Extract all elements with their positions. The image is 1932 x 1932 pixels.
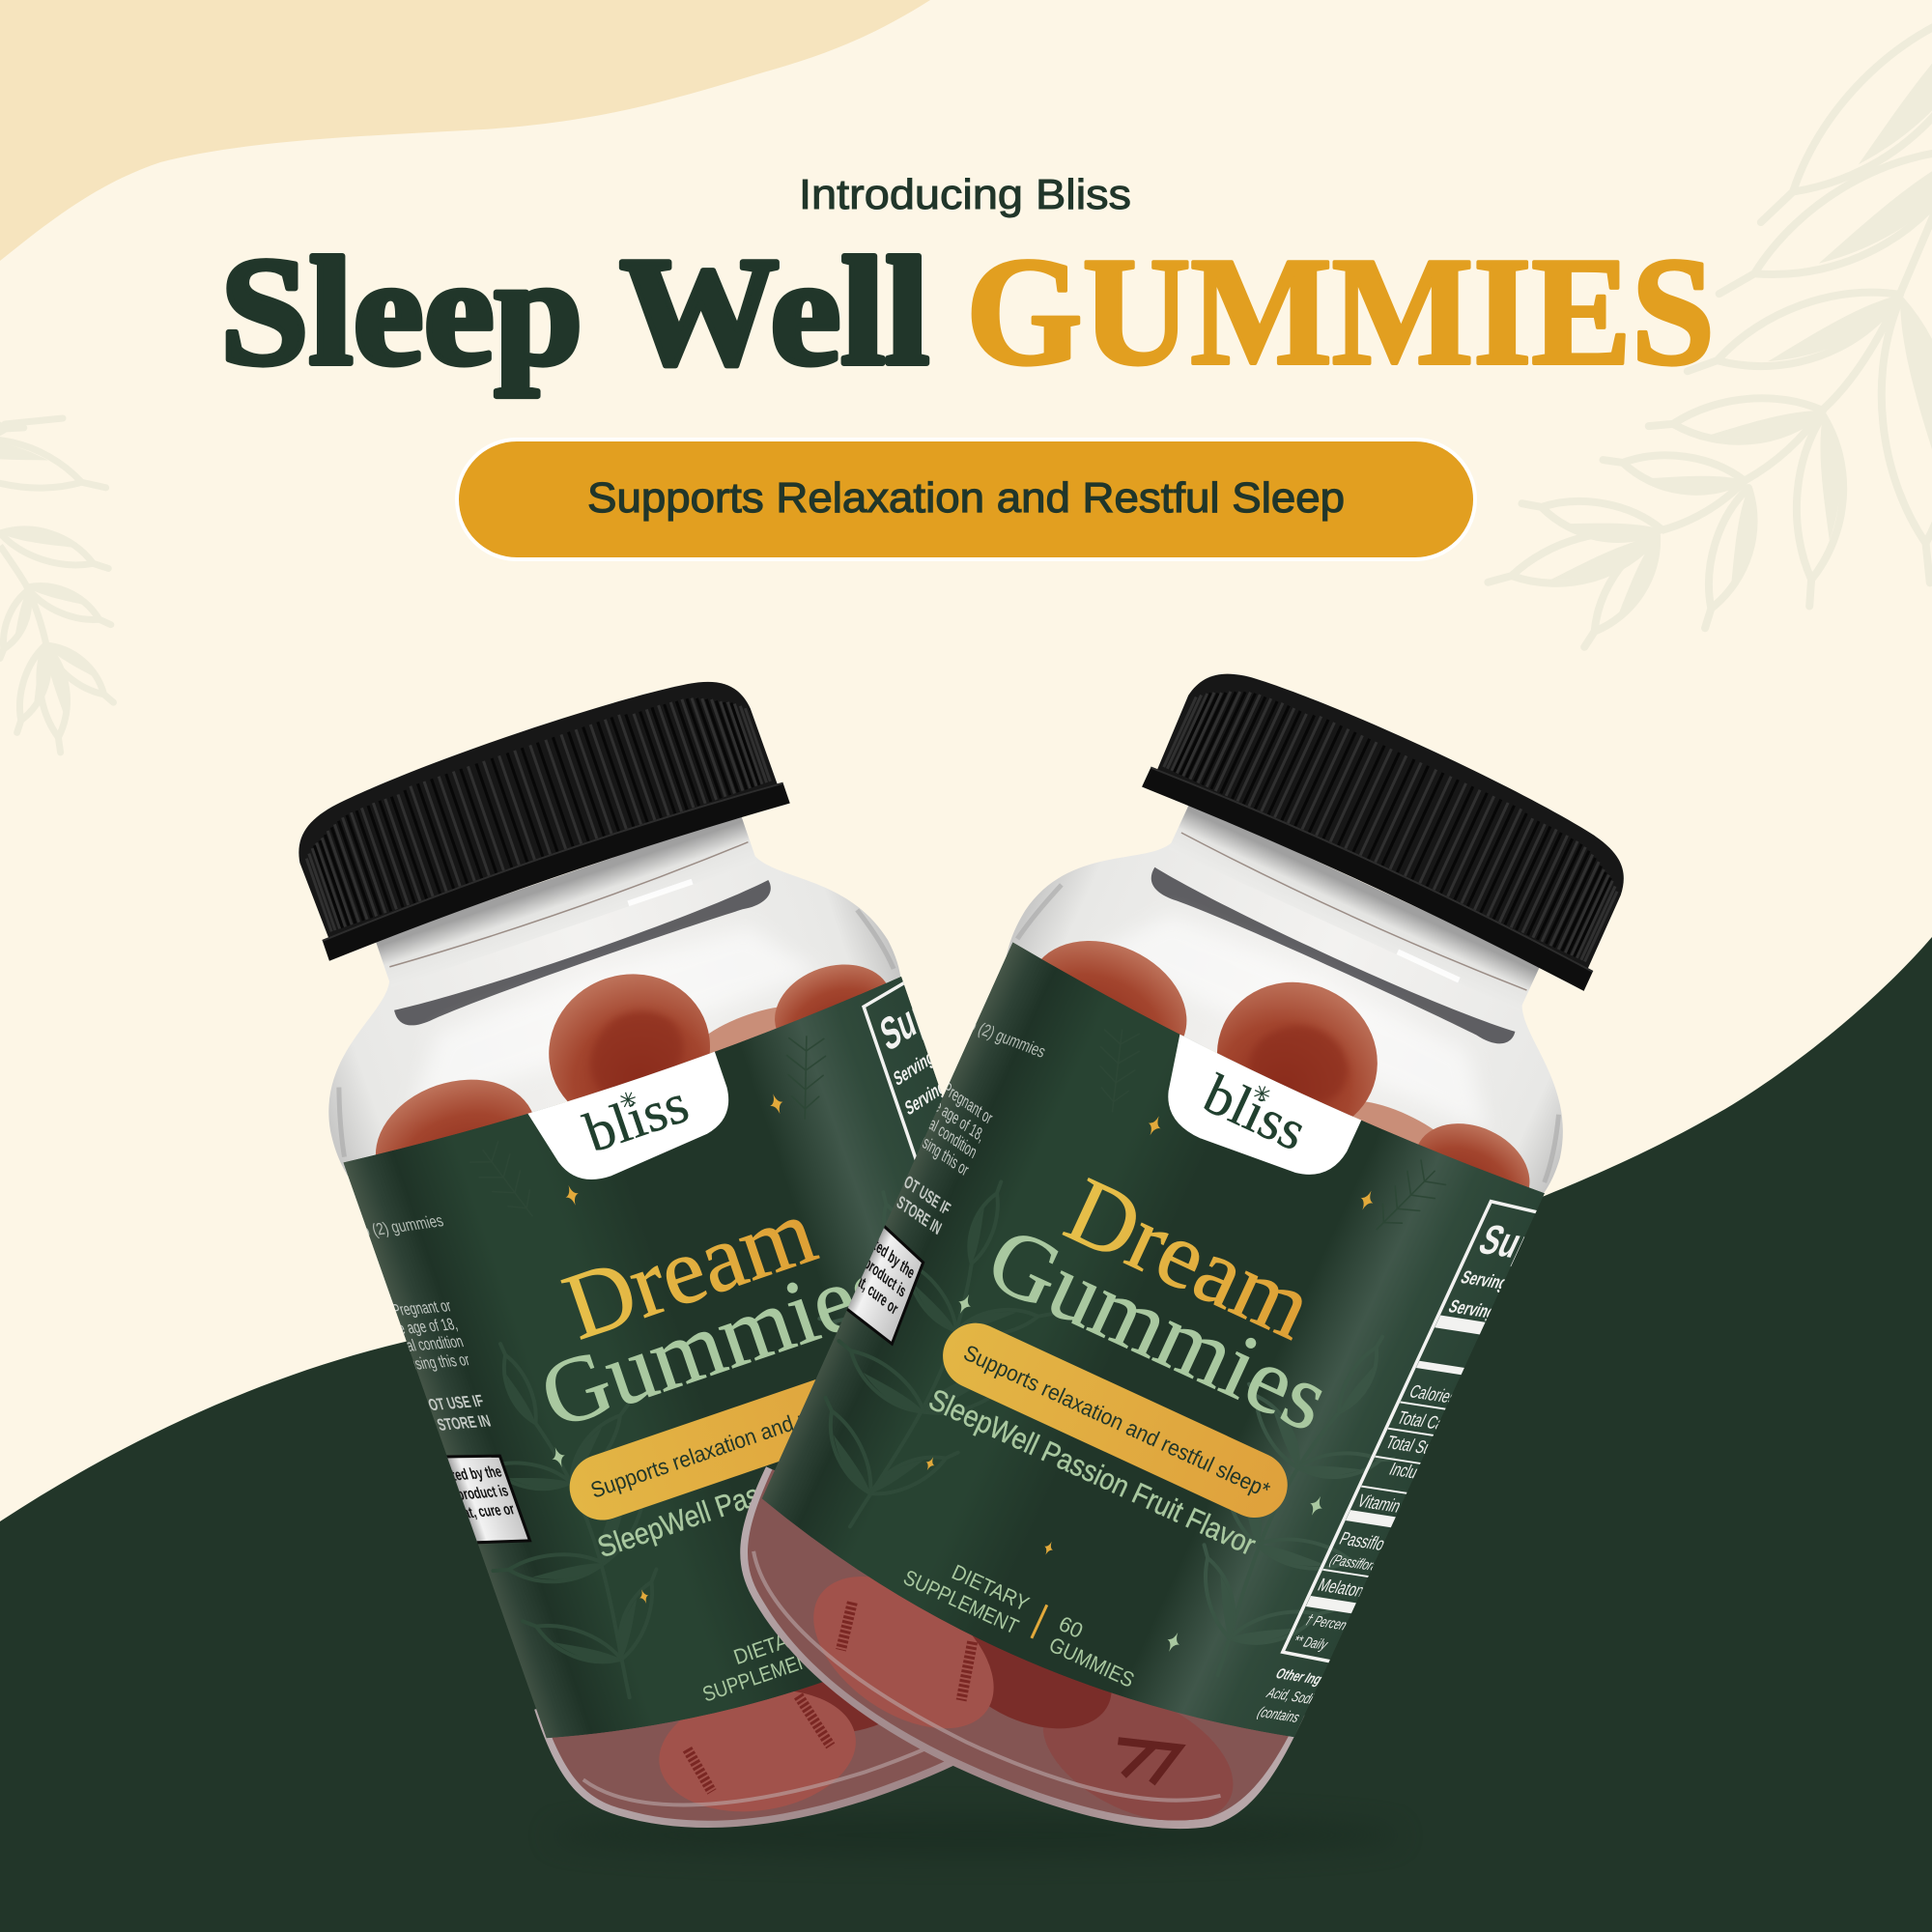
disclaimer box: treat, cure or	[842, 1263, 900, 1320]
logo tab	[1168, 1034, 1362, 1175]
supplement panel, left bottle: Supplement	[875, 926, 1028, 1062]
bottle: left	[181, 602, 1264, 1911]
side text: warning: before using this or	[887, 1110, 972, 1180]
dietary supplement: SUPPLEMENT	[699, 1644, 824, 1707]
benefit pill: Supports relaxation and restful sleep*	[960, 1340, 1274, 1503]
disclaimer box	[446, 1455, 531, 1544]
supplement panel, left bottle: Serving Size	[892, 1030, 960, 1091]
dietary supplement	[703, 1634, 803, 1700]
decorative leaves: left branch	[0, 411, 121, 754]
side text: warning: MISSING. STORE IN	[851, 1162, 944, 1239]
supplement facts panel: (contains	[1255, 1704, 1302, 1725]
supplement facts panel: (Passiflora	[1327, 1551, 1381, 1575]
supplement facts panel: Supplement	[1472, 1217, 1655, 1287]
dietary supplement: DIETARY	[730, 1620, 816, 1669]
product name: Dream: Dream	[552, 1179, 828, 1360]
product name: Dream: Dream	[1051, 1158, 1327, 1360]
flavor: SleepWell Passion Fruit Flavor	[923, 1382, 1261, 1562]
supplement facts panel: Calories	[1406, 1381, 1461, 1407]
title: Sleep Well: Sleep Well	[220, 225, 929, 397]
tagline pill	[457, 440, 1475, 559]
disclaimer box	[846, 1225, 925, 1347]
supplement facts panel: Vitamin	[1354, 1491, 1405, 1517]
bottle shadow	[551, 1816, 1401, 1855]
logo: bliss: bliss	[1195, 1062, 1316, 1163]
side text: warning: medical condition	[374, 1332, 466, 1358]
label: right bottle	[761, 943, 1545, 1737]
logo tab	[527, 1051, 728, 1179]
side text: serving note: Size: Two (2) gummies	[922, 1000, 1048, 1062]
dietary supplement: GUMMIES	[851, 1603, 945, 1655]
side text: warning: if you are Pregnant or	[341, 1296, 454, 1324]
product name: Gummies: Gummies	[528, 1234, 903, 1448]
stars	[464, 1065, 1021, 1677]
disclaimer box: This product is	[430, 1483, 511, 1506]
dietary supplement and count: DIETARY	[948, 1560, 1033, 1616]
disclaimer box: treat, cure or	[447, 1501, 518, 1523]
dark green wave	[0, 937, 1932, 1932]
supplement facts panel: Other Ingredients	[1273, 1665, 1363, 1693]
decorative leaves: right branch	[1483, 0, 1932, 657]
supplement facts panel: † Percent	[1303, 1611, 1353, 1634]
title: GUMMIES: GUMMIES	[966, 225, 1715, 397]
supplement facts panel: Includes	[1386, 1459, 1441, 1486]
disclaimer box: evaluated by the	[845, 1215, 917, 1284]
dietary supplement and count	[904, 1565, 1134, 1687]
dietary supplement and count: 60	[1055, 1611, 1087, 1643]
supplement facts panel	[1256, 1200, 1537, 1722]
supplement facts panel: Servings	[1445, 1296, 1507, 1323]
supplement panel, left bottle: Servings	[902, 1071, 953, 1121]
supplement facts panel: Melatonin	[1315, 1575, 1378, 1603]
supplement facts panel: Total Sugars	[1382, 1432, 1461, 1463]
supplement facts panel: ** Daily	[1291, 1633, 1331, 1653]
supplement facts panel: Passiflora	[1336, 1528, 1400, 1556]
side text: warning: medical condition	[902, 1097, 980, 1163]
side text: serving note: Size: Two (2) gummies	[312, 1212, 446, 1248]
side text: warning: before using this or	[372, 1350, 472, 1378]
logo: bliss	[580, 1092, 688, 1151]
logo: bliss: bliss	[577, 1071, 696, 1164]
side text: warning: DO NOT USE IF	[398, 1392, 486, 1417]
eyebrow: Introducing Bliss: Introducing Bliss	[799, 171, 1131, 218]
benefit pill: Supports relaxation and restful sleep*	[587, 1371, 912, 1503]
disclaimer box: This product is	[842, 1238, 908, 1302]
side text: warning: under the age of 18,	[355, 1315, 460, 1342]
benefit pill	[570, 1379, 815, 1520]
top-left cream wave	[0, 0, 930, 261]
supplement facts panel: Total Carb	[1394, 1407, 1460, 1435]
flavor: SleepWell Passion Fruit Flavor	[593, 1417, 941, 1564]
title	[220, 225, 1715, 397]
side text: warning: DO NOT USE IF	[878, 1156, 953, 1220]
side text: warning: under the age of 18,	[898, 1072, 987, 1147]
dietary supplement and count: GUMMIES	[1045, 1633, 1138, 1692]
product name: Gummies: Gummies	[973, 1206, 1345, 1451]
logo: bliss	[1204, 1072, 1302, 1149]
bottle: right	[740, 674, 1624, 1830]
supplement facts panel: Serving Size	[1458, 1266, 1540, 1298]
side text: warning	[896, 1083, 993, 1235]
dietary supplement: 60	[843, 1603, 874, 1633]
disclaimer box: evaluated by the	[416, 1463, 504, 1488]
side text: warning	[393, 1301, 491, 1431]
dietary supplement and count: SUPPLEMENT	[900, 1565, 1022, 1638]
supplement facts panel: Acid, Sodium	[1264, 1685, 1330, 1709]
stars	[904, 1117, 1374, 1687]
label: left bottle	[344, 976, 943, 1739]
side text: warning: if you are Pregnant or	[900, 1051, 995, 1129]
supplement panel, left bottle	[862, 981, 943, 1160]
side text: warning: MISSING. STORE IN	[382, 1412, 494, 1439]
tagline pill: Supports Relaxation and Restful Sleep	[587, 474, 1345, 522]
